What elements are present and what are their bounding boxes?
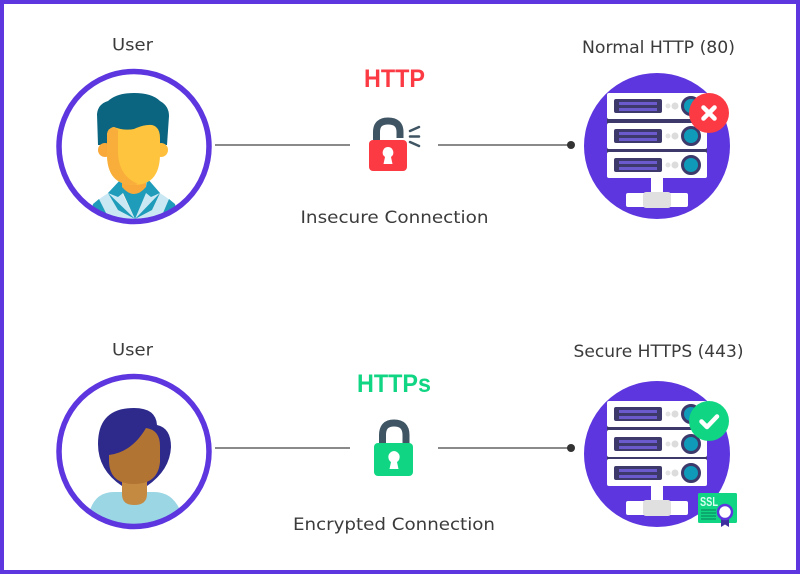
label: encrypted connection: Encrypted Connection	[293, 515, 495, 535]
avatar ring: male user	[59, 72, 209, 222]
badge: green check	[689, 401, 729, 441]
badge: red cross	[689, 93, 729, 133]
heading: HTTP: HTTP	[364, 65, 425, 93]
label: user bottom: User	[112, 340, 153, 360]
label: insecure connection: Insecure Connection	[300, 208, 488, 228]
label: secure HTTPS: Secure HTTPS (443)	[574, 342, 744, 362]
icon: closed green padlock	[374, 423, 413, 476]
icon: open red padlock	[369, 121, 419, 171]
label: normal HTTP: Normal HTTP (80)	[582, 38, 735, 58]
icon: SSL certificate	[698, 493, 737, 527]
label: user top: User	[112, 36, 153, 56]
connector: bottom right	[438, 444, 575, 452]
icon: male user avatar	[90, 93, 178, 222]
connector: top right	[438, 141, 575, 149]
icon: HTTP server	[584, 73, 730, 219]
icon: HTTPS server	[584, 381, 737, 527]
connector: bottom left	[215, 447, 350, 449]
avatar ring: female user	[59, 376, 209, 526]
connector: top left	[215, 144, 350, 146]
heading: HTTPs: HTTPs	[357, 370, 431, 398]
icon: SSL certificate: SSL	[700, 494, 718, 509]
icon: female user avatar	[90, 408, 180, 530]
